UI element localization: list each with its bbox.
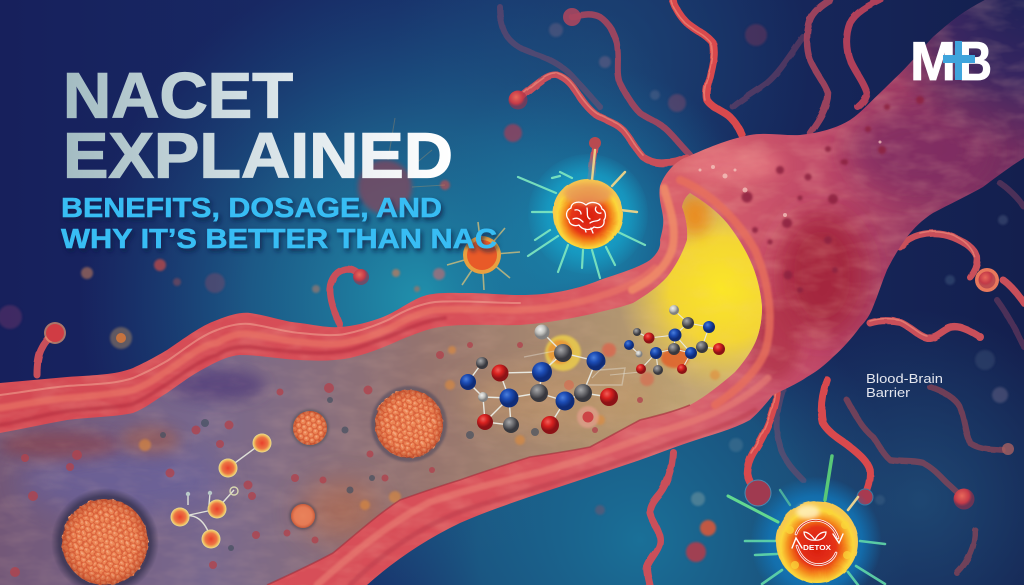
icon: detox cycle: DETOX [803,543,831,552]
secondary molecule [592,305,725,386]
lumen speckles [10,342,643,577]
logo: M [910,30,956,92]
wall surface pores [698,96,924,293]
wall highlight stripes [0,180,770,585]
title: NACET [63,60,293,132]
icon: detox cycle [792,520,843,565]
detox star burst [728,456,885,585]
logo [910,30,992,92]
icon: brain [567,202,605,233]
label: blood-brain barrier: Blood-Brain [866,371,943,386]
small molecule cluster [170,434,272,548]
medium blood cell [291,409,329,447]
subtitle [61,192,497,254]
small star: background [447,222,520,290]
large blood cell: lower left [51,488,159,585]
logo: B [959,30,992,92]
large blood cell: centre [371,386,447,462]
small blood cell [289,502,317,530]
main molecule [460,324,625,434]
brain star burst [518,150,648,278]
label: blood-brain barrier: Barrier [866,385,911,400]
lumen edge crease [267,405,690,585]
subtitle: BENEFITS, DOSAGE, AND [61,192,442,223]
title: EXPLAINED [63,120,453,192]
label: blood-brain barrier [866,371,943,400]
title [63,60,453,192]
subtitle: WHY IT’S BETTER THAN NAC [61,223,497,254]
vessel lumen [0,193,762,585]
